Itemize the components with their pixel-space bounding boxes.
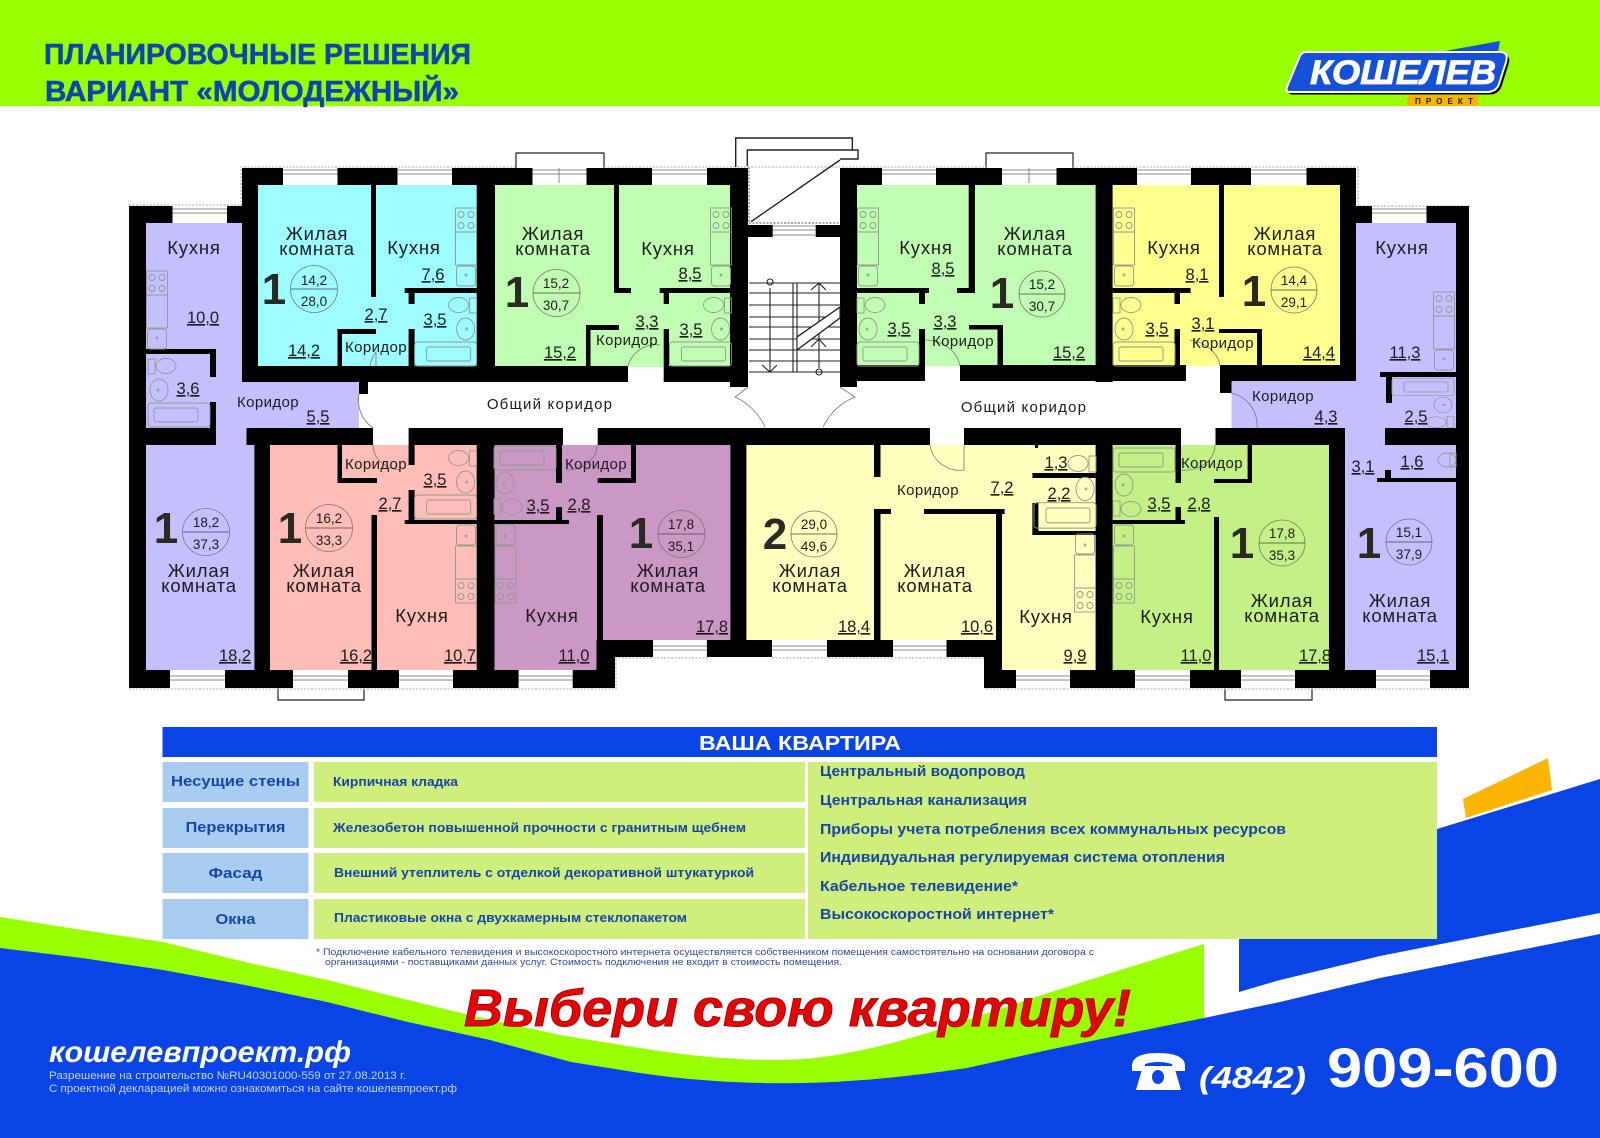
building walls [129,168,1469,688]
apartment: pink: 16,2 [340,647,372,665]
decorative swoosh: lime band [0,917,1204,1090]
apartment: lime: 3,5 [1148,495,1170,513]
apartment: lilac right: 15,1 [1396,525,1422,540]
apartment: cream two-room: 7,2 [991,479,1013,497]
apartment: lilac right: Кухня [1375,237,1429,258]
apartment: lilac top-left kitchen labels: Коридор [237,394,299,411]
apartment: yellow: Коридор [1192,335,1254,352]
common corridor labels: Общий коридор [487,396,613,413]
door swings [358,340,1257,470]
apartment: lime: Коридор [1181,455,1243,472]
apartment: pink: 3,5 [424,471,446,489]
apartment: green top-left: Жилая [522,223,584,244]
apartment: lilac top-left kitchen labels: 10,0 [187,309,219,327]
website and permit text: кошелевпроект.рф [49,1036,351,1069]
website and permit text: С проектной декларацией можно ознакомиться на сайте кошелевпроект.рф [49,1083,457,1095]
apartment: purple: Коридор [565,456,627,473]
windows and balconies [129,153,1470,700]
apartment: pink: 16,2 [316,511,342,526]
apartment: pink: 2,7 [379,495,401,513]
apartment: purple: 2,8 [568,496,590,514]
apartment: purple: 17,8 [696,618,728,636]
utilities list: Высокоскоростной интернет* [820,907,1054,923]
common corridor labels: Общий коридор [961,399,1087,416]
stair arrow: up [811,283,826,375]
inner partitions: lower row [372,515,377,670]
apartment: yellow [1146,223,1335,362]
apartment: lilac right: 1 [1357,519,1381,568]
apartment: yellow: Кухня [1147,237,1201,258]
apartment: green top-left: 3,3 [636,313,658,331]
website and permit text [49,1036,457,1095]
row: Перекрытия: Железобетон повышенной прочности с гранитным щебнем [332,820,746,835]
apartment: green top-right: 15,2 [1029,277,1055,292]
row: Фасад [162,853,805,893]
heading bar: ВАША КВАРТИРА [699,733,901,755]
apartment: cream two-room: Жилая [904,560,966,581]
apartment: cream two-room: 2 [763,510,787,559]
apartment: cyan: 7,6 [422,266,444,284]
apartment: lime: Кухня [1140,606,1194,627]
apartment: yellow: комната [1247,238,1323,259]
row: Перекрытия: Перекрытия [186,819,286,836]
apartment: pink: Кухня [395,605,449,626]
utilities list: Центральный водопровод [820,764,1025,780]
apartment: green top-left: 15,2 [543,276,569,291]
apartment: lilac right: 11,3 [1390,344,1420,362]
apartment: lilac top-left kitchen labels [154,237,329,665]
apartment: lime: 11,0 [1181,647,1211,665]
apartment: yellow: Жилая [1254,223,1316,244]
title: ПЛАНИРОВОЧНЫЕ РЕШЕНИЯ [44,39,471,71]
apartment: lilac top-left kitchen labels: 37,3 [193,537,219,552]
footnote: организациями - поставщиками данных услуг. Стоимость подключения не входит в стоимость помещения. [325,957,842,968]
apartment: cyan: 2,7 [365,306,387,324]
apartment: lime [1140,455,1331,665]
heading bar [162,727,1437,757]
apartment: green top-right: 15,2 [1053,344,1085,362]
apartment: yellow: 8,1 [1186,266,1208,284]
apartment: green top-right: 30,7 [1029,299,1055,314]
apartment: cyan: 28,0 [301,294,327,309]
panel: Ваша квартира [162,727,1437,939]
apartment: lime: 1 [1230,519,1254,568]
row: Перекрытия [162,808,805,848]
apartment: pink: комната [286,575,362,596]
apartment: cyan: Жилая [286,223,348,244]
apartment: lilac right: 1,6 [1401,453,1423,471]
decorative: lower blue field [0,934,1600,1138]
apartment: cream two-room: Коридор [897,482,959,499]
row: Несущие стены: Несущие стены [171,773,300,790]
phone number: (4842) [1199,1060,1306,1095]
apartment: lime: комната [1244,605,1320,626]
decorative: right upper blue shape [1239,779,1600,992]
footnote [316,947,1094,968]
apartment: yellow: 14,4 [1281,273,1308,288]
fixtures: kitchens and bathrooms [146,208,1456,612]
apartment: lime: 35,3 [1269,548,1295,563]
row: Несущие стены: Кирпичная кладка [333,774,459,789]
apartment: lilac top-left kitchen labels: 3,6 [177,380,199,398]
apartment: lilac top-left kitchen labels: комната [161,575,237,596]
apartment: purple: Жилая [637,560,699,581]
apartment: green top-left: 1 [505,268,529,317]
apartment: green top-right: 3,3 [934,313,956,331]
utilities list: Приборы учета потребления всех коммунальных ресурсов [820,822,1286,838]
apartment: green top-right: 3,5 [888,320,910,338]
footnote: * Подключение кабельного телевидения и высокоскоростного интернета осуществляется собственником помещения самостоятельно на основании договора с [316,947,1094,958]
apartment: green top-right [888,223,1085,362]
apartment: lilac top-left kitchen labels: 18,2 [219,647,251,665]
apartment: yellow: 14,4 [1303,344,1335,362]
apartment: cream two-room [763,454,1086,665]
apartment: cyan: 3,5 [424,311,446,329]
apartment: lilac right: 4,3 [1315,408,1337,426]
apartment: pink: Коридор [345,456,407,473]
logo: Кошелев Проект [1286,41,1509,106]
logo: Кошелев Проект: КОШЕЛЕВ [1310,54,1496,92]
apartment: purple: Кухня [525,605,579,626]
apartment: lime: 17,8 [1269,526,1295,541]
apartment: cream two-room: 49,6 [801,539,827,554]
room colour fills [146,185,1456,670]
apartment: cyan: 14,2 [301,273,327,288]
title: ВАРИАНТ «МОЛОДЕЖНЫЙ» [45,74,459,108]
apartment: green top-right: 8,5 [932,260,954,278]
apartment: lilac top-left kitchen labels: 18,2 [193,515,219,530]
apartment: purple: 1 [629,509,653,558]
apartment: cream two-room: 18,4 [838,618,870,636]
apartment: lilac top-left kitchen labels: 5,5 [307,408,329,426]
apartment: lilac top-left kitchen labels: Жилая [168,560,230,581]
row: Несущие стены [162,762,805,802]
apartment: green top-right: комната [997,238,1073,259]
row: Фасад: Фасад [208,865,263,882]
website and permit text: Разрешение на строительство №RU40301000-559 от 27.08.2013 г. [49,1070,406,1082]
apartment: cyan [262,223,446,360]
apartment: cream two-room: 2,2 [1048,485,1070,503]
logo: Кошелев Проект: ПРОЕКТ [1415,97,1473,106]
apartment: cream two-room: Кухня [1019,606,1073,627]
apartment: pink: 1 [278,504,302,553]
utilities list: Индивидуальная регулируемая система отопления [820,850,1225,866]
apartment: lilac right: 15,1 [1417,647,1449,665]
apartment: green top-left: 30,7 [543,298,569,313]
apartment: yellow: 3,1 [1192,315,1214,333]
title [44,39,471,108]
utilities list: Кабельное телевидение* [820,879,1018,895]
apartment: green top-left: 3,5 [680,321,702,339]
icon: telephone [1132,1053,1185,1090]
slogan: Выбери свою квартиру! [464,980,1131,1038]
apartment: cream two-room: комната [772,575,848,596]
apartment: lime: 17,8 [1299,647,1331,665]
apartment: green top-left: Коридор [596,332,658,349]
apartment: cyan: 1 [262,265,286,314]
apartment: cyan: 14,2 [288,342,320,360]
phone number: 909-600 [1327,1036,1559,1099]
apartment: yellow: 3,5 [1146,320,1168,338]
apartment: lilac right: 2,5 [1405,408,1427,426]
apartment: pink: 10,7 [444,647,476,665]
apartment: cyan: Коридор [345,339,407,356]
apartment: cream two-room: 1,3 [1045,454,1067,472]
apartment: lilac right: комната [1362,605,1438,626]
apartment: purple: 3,5 [527,497,549,515]
row: Окна: Окна [216,911,256,928]
apartment: lilac right: 3,1 [1352,458,1374,476]
apartment: green top-left: 8,5 [679,265,701,283]
apartment: lilac top-left kitchen labels: Кухня [167,237,221,258]
apartment: cyan: комната [279,238,355,259]
row: Фасад: Внешний утеплитель с отделкой декоративной штукатуркой [334,865,754,880]
apartment: lilac top-left kitchen labels: 1 [154,504,178,553]
apartment: green top-left: 15,2 [544,344,576,362]
apartment: lilac right: 37,9 [1396,547,1422,562]
phone number [1199,1036,1559,1099]
apartment: lilac right [1252,237,1449,665]
apartment: cream two-room: 10,6 [961,618,993,636]
apartment: cream two-room: Жилая [779,560,841,581]
inner partitions: upper row [371,185,376,297]
staircase [736,138,858,375]
header band [0,0,1600,108]
apartment: lime: Жилая [1251,590,1313,611]
stair arrow: down [762,279,777,372]
apartment: pink: 33,3 [316,533,342,548]
apartment: green top-right: Кухня [899,237,953,258]
apartment: green top-left [505,223,702,362]
apartment: yellow: 1 [1242,267,1266,316]
apartment: purple [525,456,728,665]
apartment: green top-right: 1 [990,269,1014,318]
row: Окна [162,899,805,939]
apartment: green top-left: комната [515,238,591,259]
apartment: yellow: 29,1 [1281,295,1307,310]
apartment: cream two-room: 9,9 [1064,647,1086,665]
apartment: green top-right: Жилая [1004,223,1066,244]
apartment: purple: 35,1 [668,539,694,554]
apartment: purple: 17,8 [668,517,694,532]
apartment: purple: 11,0 [559,647,589,665]
decorative: orange accent [1463,758,1552,818]
apartment: lilac right: Жилая [1369,590,1431,611]
apartment: pink: Жилая [293,560,355,581]
apartment: pink [278,456,476,665]
apartment: cream two-room: 29,0 [801,517,827,532]
utilities list: Центральная канализация [820,793,1027,809]
apartment: green top-right: Коридор [932,333,994,350]
apartment: lilac right: Коридор [1252,388,1314,405]
apartment: cream two-room: комната [897,575,973,596]
row: Окна: Пластиковые окна с двухкамерным стеклопакетом [334,910,687,925]
apartment: green top-left: Кухня [641,238,695,259]
utilities list [808,762,1437,939]
apartment: cyan: Кухня [387,237,441,258]
common corridor labels [487,396,1087,416]
apartment: purple: комната [630,575,706,596]
apartment: lime: 2,8 [1188,495,1210,513]
